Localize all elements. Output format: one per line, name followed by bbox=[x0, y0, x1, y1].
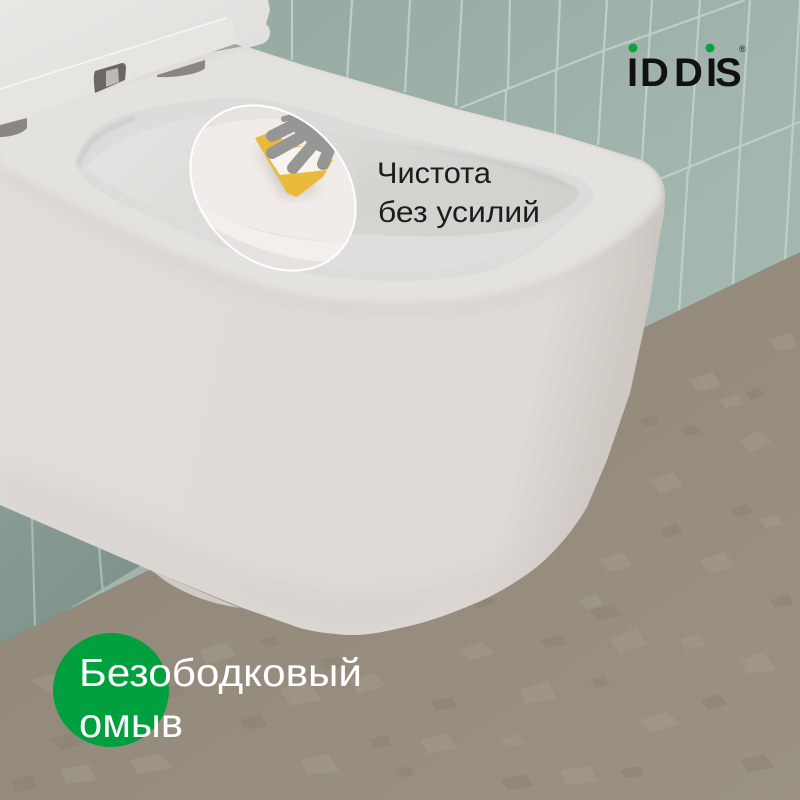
soft rim fold shading bbox=[0, 172, 665, 311]
toilet body bbox=[0, 46, 665, 635]
title: Безободковый bbox=[79, 652, 362, 695]
bowl left rim shadow bbox=[78, 118, 135, 166]
bowl interior bbox=[86, 112, 579, 259]
sponge bbox=[255, 133, 333, 197]
seat buffers bbox=[0, 60, 205, 137]
seat hinge bbox=[94, 63, 126, 93]
bowl opening bbox=[76, 97, 594, 281]
seat band bbox=[0, 18, 236, 125]
lens outline bbox=[157, 72, 389, 304]
terrazzo floor bbox=[0, 252, 800, 800]
glove bbox=[272, 117, 329, 168]
water sheen bbox=[174, 213, 578, 272]
wall bracket underside bbox=[150, 570, 240, 608]
lower body shading bbox=[22, 497, 23, 498]
callout text: Чистота bbox=[377, 157, 491, 190]
callout text: без усилий bbox=[378, 196, 540, 229]
logo: IDDIS: IDDIS bbox=[627, 51, 742, 95]
back bowl shadow bbox=[322, 134, 578, 192]
title: омыв bbox=[79, 700, 183, 746]
callout: lens with sponge and glove bbox=[190, 104, 357, 272]
title bbox=[79, 652, 362, 746]
toilet bbox=[0, 46, 672, 635]
toilet seat bbox=[0, 0, 270, 137]
logo dots bbox=[628, 44, 714, 52]
shadow under sponge bbox=[255, 145, 320, 198]
rim top highlight bbox=[362, 100, 662, 299]
right edge shading bbox=[610, 190, 672, 480]
registered mark: ® bbox=[739, 44, 746, 54]
callout text bbox=[377, 157, 540, 229]
green accent circle bbox=[53, 633, 169, 747]
